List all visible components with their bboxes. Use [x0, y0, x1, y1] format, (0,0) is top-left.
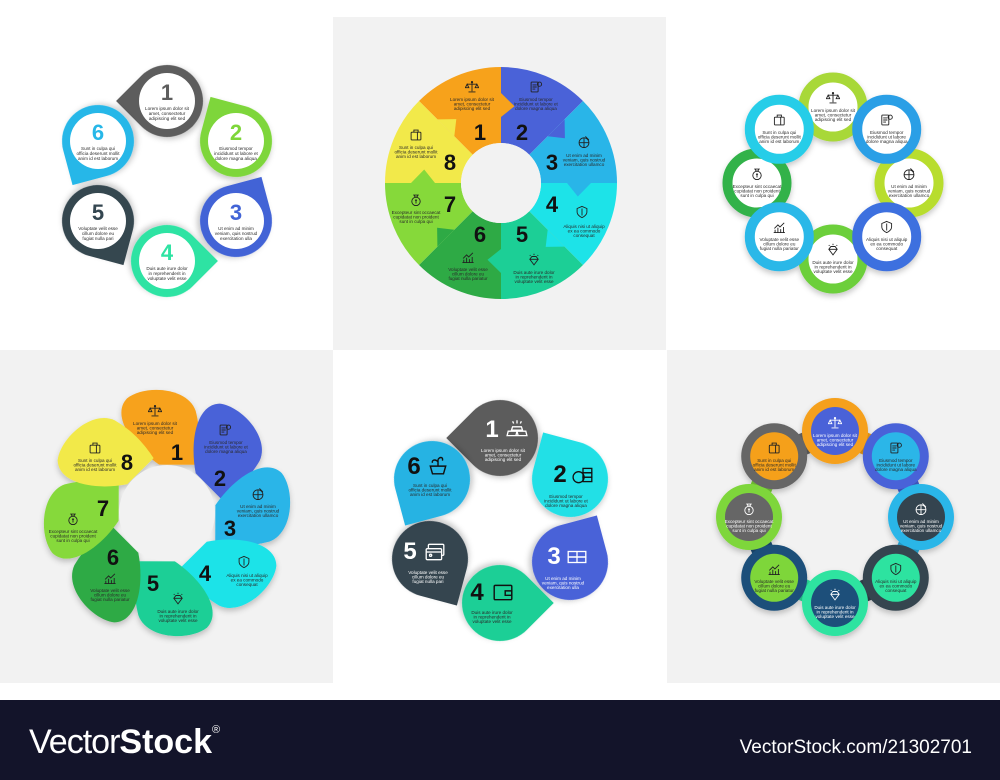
ring contents: sunt in culpa qui	[740, 193, 774, 198]
ring contents: Sunt in culpa qui	[762, 130, 796, 135]
petal icons and text: cillum dolore eu	[94, 592, 127, 598]
chain contents: cillum dolore eu	[758, 584, 791, 588]
drop 3: 3	[547, 543, 561, 570]
segment icons and text: ex ea commodo	[568, 228, 601, 234]
petal icons and text: Lorem ipsum dolor sit	[133, 421, 178, 426]
petal numbers: 2	[214, 466, 226, 491]
chain contents: in reprehenderit in	[816, 610, 854, 614]
segment numbers: 2	[516, 120, 528, 145]
segment icons and text: exercitation ullamco	[564, 162, 605, 167]
step 1 pin	[116, 50, 218, 152]
petal numbers: 8	[121, 450, 133, 475]
petal icons and text: voluptate velit esse	[158, 618, 198, 623]
step 4 pin: voluptate velit esse	[147, 276, 187, 281]
step 3 pin: exercitation ulla	[220, 236, 252, 241]
footer bar	[0, 700, 1000, 780]
segment icons and text: Lorem ipsum dolor sit	[450, 97, 495, 102]
segment icons and text: cupidatat non proident	[393, 214, 439, 220]
segment icons and text: Excepteur sint occaecat	[392, 210, 441, 215]
step 1 pin: 1	[161, 80, 173, 105]
segment icons and text: cillum dolore eu	[452, 272, 485, 276]
petal numbers	[97, 440, 236, 596]
chain contents: voluptate velit esse	[815, 614, 855, 619]
chain contents: incididunt ut labore	[877, 462, 916, 468]
drop 3: Ut enim ad minim	[545, 576, 581, 581]
chain contents: consequat	[885, 588, 907, 593]
petal icons and text: consequat	[236, 582, 258, 587]
step 2 pin	[192, 97, 280, 185]
petal icons and text: anim id est laborum	[75, 467, 115, 472]
petal icons and text: in reprehenderit in	[159, 614, 197, 618]
drop 2	[523, 432, 617, 526]
ring contents: Excepteur sint occaecat	[733, 184, 782, 189]
chain contents: Excepteur sint occaecat	[725, 519, 774, 524]
step 3 pin: Ut enim ad minim	[218, 226, 254, 231]
drop 4: in reprehenderit in	[473, 614, 511, 620]
drop 6: 6	[407, 453, 421, 480]
ring contents: Ut enim ad minim	[891, 184, 927, 189]
step 3 pin	[192, 177, 280, 265]
segment icons and text: amet, consectetur	[454, 102, 491, 106]
segment icons and text: fugiat nulla pariatur	[448, 276, 488, 281]
ring contents: adipiscing elit sed	[815, 117, 852, 122]
panel: linked circles chain (bottom-right)	[716, 398, 954, 636]
drop 3: exercitation ulla	[547, 585, 579, 590]
petal icons and text: officia deserunt mollit	[73, 462, 117, 468]
segment icons and text: Eiusmod tempor	[519, 97, 553, 102]
step 3 pin: veniam, quis nostrud	[215, 231, 258, 236]
segment numbers: 4	[546, 192, 559, 217]
segment numbers	[444, 120, 559, 247]
segment icons and text: adipiscing elit sed	[454, 106, 491, 111]
ring contents: Lorem ipsum dolor sit	[811, 108, 856, 113]
inner discs	[725, 407, 945, 627]
ring contents: Eiusmod tempor	[870, 130, 904, 135]
ring contents: amet, consectetur	[815, 112, 852, 118]
step 5 pin: Voluptate velit esse	[78, 226, 118, 231]
segment icons and text: dolore magna aliqua	[515, 106, 557, 111]
chain contents: cupidatat non proident	[726, 524, 772, 528]
petal icons and text: Ut enim ad minim	[240, 504, 276, 509]
chain contents: adipiscing elit sed	[817, 442, 854, 447]
step 6 pin: anim id est laborum	[78, 156, 118, 161]
drop 1: 1	[485, 416, 499, 443]
chain contents: Duis aute irure dolor	[814, 605, 856, 610]
petal icons and text: Aliquis nisi ut aliquip	[226, 573, 268, 578]
segment numbers: 8	[444, 150, 456, 175]
step 3 pin: 3	[230, 200, 242, 225]
chain contents: anim id est laborum	[754, 467, 794, 472]
petal icons and text: adipiscing elit sed	[137, 430, 174, 435]
petal icons and text: fugiat nulla pariatur	[90, 597, 130, 602]
segment wedges	[385, 67, 617, 299]
segment icons and text: incididunt ut labore et	[514, 102, 559, 106]
panel: eight interlocking rings (top-right)	[728, 78, 938, 288]
ring contents: consequat	[876, 246, 898, 251]
drop 2: 2	[553, 461, 567, 488]
chain contents: Sunt in culpa qui	[757, 458, 791, 463]
segment numbers: 7	[444, 192, 456, 217]
drop 2: Eiusmod tempor	[549, 494, 583, 499]
drop 5: Voluptate velit esse	[408, 570, 448, 575]
drop 3: veniam, quis nostrud	[542, 580, 585, 586]
drop 1	[446, 384, 554, 492]
drop 6: anim id est laborum	[410, 492, 450, 497]
panel: eight-petal flower (bottom-left)	[42, 388, 292, 638]
petal icons and text: Excepteur sint occaecat	[49, 529, 98, 534]
step 1 pin: Lorem ipsum dolor sit	[145, 106, 190, 111]
petal numbers: 3	[224, 516, 236, 541]
petal icons and text: Voluptate velit esse	[90, 588, 130, 593]
step 6 pin: 6	[92, 120, 104, 145]
footer url: VectorStock.com/21302701	[740, 737, 972, 758]
ring contents: dolore magna aliqua	[866, 139, 908, 144]
step 1 pin: adipiscing elit sed	[149, 116, 186, 121]
step 6 pin: officia deserunt mollit	[76, 151, 120, 156]
drop 4	[446, 549, 554, 657]
petal icons and text: dolore magna aliqua	[205, 449, 247, 454]
ring contents: anim id est laborum	[759, 139, 800, 144]
drop 4: Duis aute irure dolor	[471, 610, 513, 615]
segment icons and text: Sunt in culpa qui	[399, 145, 433, 150]
step 2 pin: dolore magna aliqua	[215, 156, 257, 161]
petal icons and text: sunt in culpa qui	[56, 538, 90, 543]
petal icons and text: cupidatat non proident	[50, 534, 96, 538]
chain contents: Lorem ipsum dolor sit	[813, 433, 858, 438]
step 2 pin: 2	[230, 120, 242, 145]
drop 2: dolore magna aliqua	[545, 503, 587, 508]
panel: six filled teardrops (bottom-middle)	[383, 384, 617, 657]
petal numbers: 6	[107, 545, 119, 570]
panel: six teardrop pins (top-left)	[54, 50, 280, 312]
segment icons and text: veniam, quis nostrud	[563, 158, 606, 162]
ring contents: fugiat nulla pariatur	[760, 246, 799, 251]
step 2 pin: Eiusmod tempor	[219, 146, 253, 151]
petal icons and text: veniam, quis nostrud	[237, 508, 280, 514]
ring contents: cillum dolore eu	[763, 242, 796, 246]
outer rings	[716, 398, 954, 636]
footer logo: ®	[212, 724, 220, 736]
ring contents: Aliquis nisi ut aliquip	[866, 237, 908, 242]
petal icons and text: amet, consectetur	[137, 426, 174, 430]
drop 1: adipiscing elit sed	[485, 457, 522, 462]
ring contents: incididunt ut labore	[867, 134, 906, 140]
petal icons and text: exercitation ullamco	[238, 513, 279, 518]
drop 5	[383, 512, 477, 606]
chain contents: officia deserunt mollit	[753, 462, 796, 468]
segment icons and text: anim id est laborum	[396, 154, 436, 159]
step 4 pin: Duis aute irure dolor	[146, 266, 188, 271]
ring contents: in reprehenderit in	[814, 264, 852, 270]
drop 5: fugiat nulla pari	[412, 579, 444, 584]
ring contents: officia deserunt mollit	[758, 134, 802, 140]
ring contents: ex ea commodo	[870, 242, 903, 246]
segment icons and text: Duis aute irure dolor	[513, 270, 555, 275]
drop 5: cillum dolore eu	[412, 574, 445, 580]
petal icons and text: Duis aute irure dolor	[157, 609, 199, 614]
step 2 pin: incididunt ut labore et	[214, 151, 259, 156]
drop 3	[523, 515, 617, 609]
drop 4: voluptate velit esse	[472, 619, 512, 624]
drop 5: 5	[403, 538, 417, 565]
segment icons and text	[392, 81, 606, 284]
chain contents: exercitation ullamco	[901, 528, 942, 533]
chain contents: Voluptate velit esse	[754, 579, 794, 584]
step 1 pin: amet, consectetur	[149, 111, 186, 116]
petal numbers: 5	[147, 571, 159, 596]
rings	[728, 78, 938, 288]
step 6 pin	[54, 97, 142, 185]
ring contents: veniam, quis nostrud	[888, 188, 931, 194]
segment icons and text: in reprehenderit in	[515, 274, 553, 280]
petal icons and text: Eiusmod tempor	[209, 440, 243, 445]
ring contents: cupidatat non proident	[734, 188, 780, 194]
chain contents: Ut enim ad minim	[903, 519, 939, 524]
step 5 pin	[54, 177, 142, 265]
petal icons and text: ex ea commodo	[231, 578, 264, 582]
chain contents: fugiat nulla pariatur	[755, 588, 794, 593]
chain contents: veniam, quis nostrud	[900, 524, 943, 528]
segment icons and text: consequat	[573, 233, 595, 238]
drop 1: Lorem ipsum dolor sit	[481, 448, 526, 453]
step 6 pin: Sunt in culpa qui	[81, 146, 115, 151]
petal icons and text	[49, 405, 280, 623]
chain contents: Eiusmod tempor	[879, 458, 913, 463]
petal icons and text: Sunt in culpa qui	[78, 458, 112, 463]
center hole	[119, 465, 215, 561]
drop 2: incididunt ut labore et	[544, 498, 589, 504]
petal numbers: 1	[171, 440, 183, 465]
footer logo: VectorStock	[29, 723, 212, 761]
chain contents: amet, consectetur	[817, 438, 854, 442]
ring contents: exercitation ullamco	[889, 193, 930, 198]
step 5 pin: cillum dolore eu	[82, 231, 115, 236]
segment icons and text: sunt in culpa qui	[399, 219, 433, 224]
ring contents: Duis aute irure dolor	[812, 260, 854, 265]
segment icons and text: voluptate velit esse	[514, 279, 554, 284]
step 4 pin: 4	[161, 240, 174, 265]
step 5 pin: 5	[92, 200, 104, 225]
ring contents	[733, 92, 931, 274]
drop 6	[385, 432, 479, 526]
segment icons and text: Voluptate velit esse	[448, 267, 488, 272]
drop 4: 4	[470, 579, 484, 606]
segment numbers: 5	[516, 222, 528, 247]
segment numbers: 3	[546, 150, 558, 175]
segment icons and text: officia deserunt mollit	[394, 150, 438, 154]
chain contents: ex ea commodo	[879, 584, 913, 588]
segment numbers: 6	[474, 222, 486, 247]
petal numbers: 4	[199, 561, 212, 586]
petals	[42, 388, 292, 638]
step 4 pin: in reprehenderit in	[148, 271, 186, 276]
ring contents: voluptate velit esse	[813, 269, 853, 274]
chain contents: dolore magna aliqua	[875, 467, 917, 472]
chain contents	[725, 417, 943, 619]
chain contents: sunt in culpa qui	[732, 528, 766, 533]
ring contents: Voluptate velit esse	[760, 237, 800, 242]
chain connectors	[749, 431, 921, 603]
segment numbers: 1	[474, 120, 486, 145]
segment icons and text: Ut enim ad minim	[566, 153, 602, 158]
drop 1: amet, consectetur	[485, 452, 522, 458]
drop 6: officia deserunt mollit	[408, 488, 452, 492]
panel: eight-segment donut (top-middle)	[385, 67, 617, 299]
step 5 pin: fugiat nulla pari	[82, 236, 114, 241]
drop 6: Sunt in culpa qui	[413, 483, 447, 488]
petal icons and text: incididunt ut labore et	[204, 444, 249, 450]
step 4 pin	[116, 210, 218, 312]
chain contents: Aliquis nisi ut aliquip	[875, 579, 917, 584]
petal numbers: 7	[97, 496, 109, 521]
segment icons and text: Aliquis nisi ut aliquip	[563, 224, 605, 229]
